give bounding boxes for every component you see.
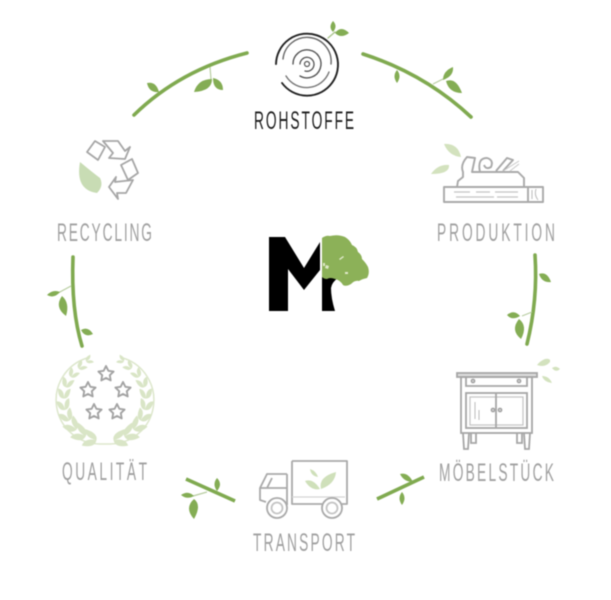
icon: truck	[260, 461, 347, 518]
label: Rohstoffe: ROHSTOFFE	[254, 108, 354, 135]
branch: bottom right	[377, 474, 424, 505]
label: Qualität: QUALITÄT	[62, 459, 147, 486]
icon: cabinet	[457, 359, 560, 449]
branch: left	[47, 257, 93, 346]
label: Möbelstück: MÖBELSTÜCK	[439, 460, 554, 487]
label: Transport: TRANSPORT	[253, 530, 355, 557]
label: Produktion: PRODUKTION	[437, 220, 555, 247]
logo: M with tree	[269, 235, 369, 311]
branch: right	[507, 255, 551, 344]
icon: laurel wreath with stars	[56, 355, 154, 448]
label: Recycling: RECYCLING	[57, 220, 152, 247]
icon: log rings	[276, 21, 349, 96]
icon: wood plane	[431, 144, 543, 202]
icon: recycling arrows with leaf	[79, 141, 138, 199]
branch: top left	[134, 53, 247, 115]
branch: bottom left	[181, 478, 235, 519]
branch: top right	[363, 54, 471, 117]
